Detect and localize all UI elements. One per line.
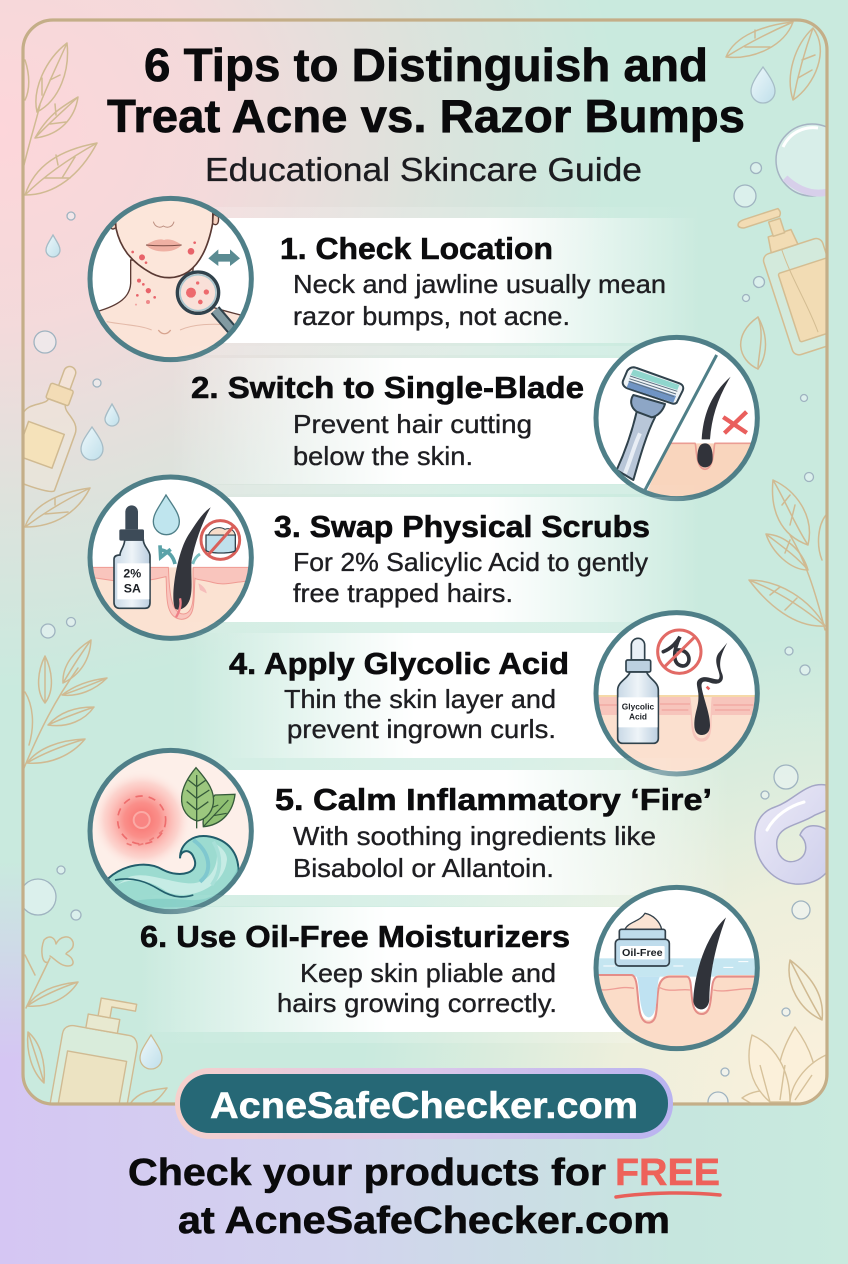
- subtitle: Educational Skincare Guide: [205, 151, 642, 188]
- gel swirl: [755, 785, 827, 884]
- panel: tip 3 swap physical scrubs: [87, 477, 710, 647]
- heading: tip 6: 6. Use Oil-Free Moisturizers: [140, 919, 570, 954]
- icon: salicylic acid bottle and trapped hair: 2%: [123, 566, 141, 580]
- text: tip 3 body: For 2% Salicylic Acid to gently: [293, 547, 648, 577]
- panel: tip 6 use oil-free moisturizers: [130, 887, 760, 1057]
- icon: glycolic acid bottle and ingrown hair: Glycolic: [622, 701, 655, 711]
- pump bottle right: [737, 208, 826, 356]
- text: tip 6 body: Keep skin pliable and: [300, 958, 556, 988]
- text: tip 4 body: [284, 684, 556, 744]
- text: tip 6 body: hairs growing correctly.: [277, 988, 557, 1018]
- icon: salicylic acid bottle and trapped hair: [87, 477, 257, 647]
- footer call to action: Check your products for: [128, 1152, 606, 1194]
- title: [107, 39, 745, 142]
- text: tip 4 body: Thin the skin layer and: [284, 684, 556, 714]
- icon: neck with bumps and magnifier: [87, 190, 253, 363]
- text: tip 3 body: [293, 547, 648, 608]
- leaf near pill: [130, 1087, 168, 1102]
- title: Treat Acne vs. Razor Bumps: [107, 90, 745, 142]
- lower background outside frame: [0, 600, 848, 1264]
- panel: tip 4 apply glycolic acid: [160, 613, 760, 779]
- flower sprig: [26, 937, 73, 1008]
- left leaf mid: [25, 488, 90, 527]
- website pill: AcneSafeChecker.com: [210, 1085, 638, 1126]
- text: tip 5 body: Bisabolol or Allantoin.: [293, 853, 554, 883]
- icon: oil-free moisturizer jar and healthy hair: Oil-Free: [622, 948, 663, 959]
- top left branch: [24, 43, 68, 165]
- text: tip 3 body: free trapped hairs.: [293, 578, 513, 608]
- pump bottle bottom left: [50, 997, 138, 1102]
- heading: tip 4: 4. Apply Glycolic Acid: [229, 646, 569, 681]
- text: tip 6 body: [277, 958, 557, 1018]
- heading: tip 1: 1. Check Location: [280, 231, 553, 266]
- text: tip 1 body: razor bumps, not acne.: [293, 301, 570, 331]
- heading: tip 2: 2. Switch to Single-Blade: [191, 370, 584, 405]
- right leaf under bottle: [741, 317, 766, 369]
- lower right leaf: [789, 960, 822, 1020]
- heading: tip 3: 3. Swap Physical Scrubs: [274, 509, 650, 544]
- text: tip 2 body: [293, 409, 532, 471]
- big iridescent bubble: [775, 123, 826, 197]
- panel: tip 1 check location: [87, 190, 710, 363]
- text: tip 5 body: [293, 821, 656, 883]
- text: tip 4 body: prevent ingrown curls.: [287, 714, 556, 744]
- text: tip 2 body: below the skin.: [293, 441, 473, 471]
- text: tip 1 body: Neck and jawline usually mean: [293, 269, 666, 299]
- text: tip 2 body: Prevent hair cutting: [293, 409, 532, 439]
- left branch lower: [24, 668, 78, 768]
- icon: oil-free moisturizer jar and healthy hair: [593, 887, 760, 1057]
- footer call to action: [128, 1152, 720, 1242]
- icon: inflamed spot, leaves and wave: [90, 750, 251, 918]
- icon: razor and cut hair: [596, 337, 760, 500]
- dropper bottle left: [24, 366, 77, 492]
- text: tip 1 body: [293, 269, 666, 331]
- panel: tip 5 calm inflammatory fire: [90, 750, 740, 918]
- icon: salicylic acid bottle and trapped hair: SA: [124, 582, 141, 596]
- panel: tip 2 switch to single-blade: [160, 337, 760, 500]
- heading: tip 5: 5. Calm Inflammatory ‘Fire’: [275, 782, 712, 817]
- text: tip 5 body: With soothing ingredients like: [293, 821, 656, 851]
- top right leaves: [726, 22, 793, 57]
- lotus: [742, 1027, 826, 1104]
- icon: glycolic acid bottle and ingrown hair: [593, 613, 760, 779]
- icon: glycolic acid bottle and ingrown hair: Acid: [629, 712, 647, 722]
- title: 6 Tips to Distinguish and: [144, 39, 708, 91]
- footer call to action: at AcneSafeChecker.com: [178, 1200, 670, 1242]
- right branch: [790, 535, 825, 630]
- footer call to action: FREE: [615, 1152, 720, 1194]
- website pill: [175, 1068, 673, 1139]
